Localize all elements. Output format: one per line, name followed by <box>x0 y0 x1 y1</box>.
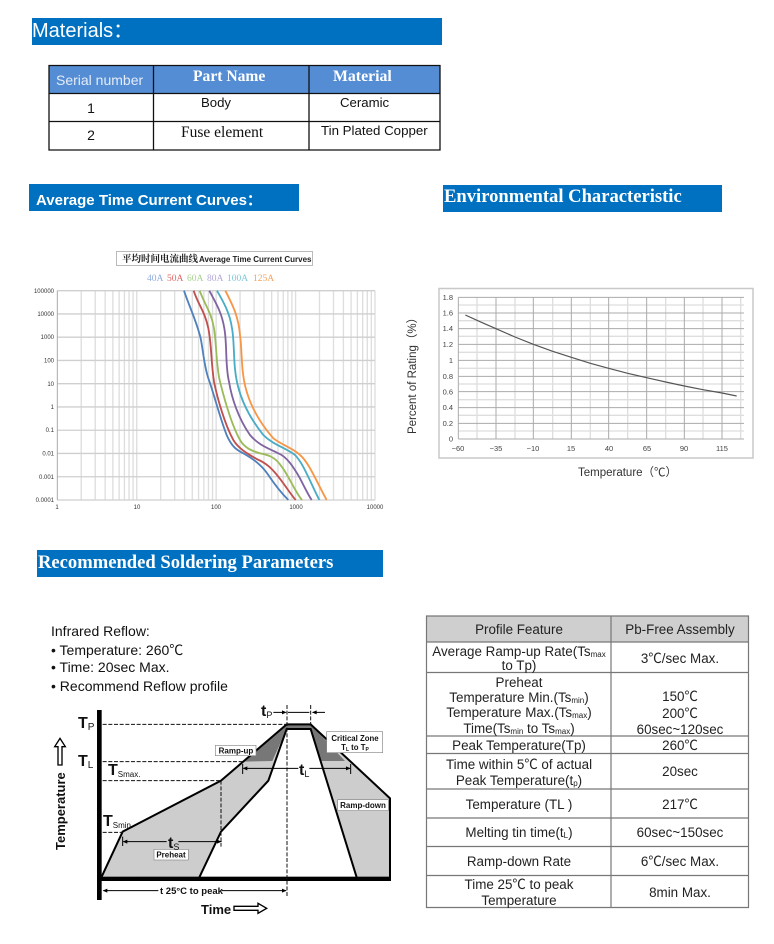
table: materials <box>49 66 440 150</box>
text block: infrared reflow: Infrared Reflow: <box>51 623 150 639</box>
table: soldering profile: Time(Ts <box>463 721 510 736</box>
table: soldering profile: Temperature <box>481 893 557 908</box>
diagram: reflow profile: Time <box>201 902 231 917</box>
chart: environmental characteristic: 0 <box>449 434 453 444</box>
legend: curve ratings: 50A <box>167 274 184 284</box>
text block: infrared reflow: • Recommend Reflow profile <box>51 678 228 694</box>
diagram: reflow profile: L <box>304 769 309 779</box>
diagram: reflow profile: T <box>341 743 346 752</box>
diagram: reflow profile: t <box>299 762 304 779</box>
chart: environmental characteristic: 1.6 <box>443 308 453 318</box>
table: soldering profile: Ramp-down Rate <box>467 854 571 869</box>
table: soldering profile: 60sec~150sec <box>637 825 724 840</box>
table: materials: Ceramic <box>340 95 389 110</box>
heading: Recommended Soldering Parameters: Recommended Soldering Parameters <box>38 552 333 573</box>
chart: environmental characteristic: 1.8 <box>443 293 453 302</box>
diagram: reflow profile: Temperature <box>53 772 68 850</box>
chart title: average time current curves: 平均时间电流曲线 <box>122 253 199 265</box>
diagram: reflow profile: Ramp-up <box>219 746 253 756</box>
table: soldering profile: Profile Feature <box>475 622 563 637</box>
chart: environmental characteristic: 0.6 <box>443 388 453 396</box>
table: soldering profile: 6℃/sec Max. <box>641 854 719 869</box>
diagram: reflow profile: L <box>346 747 349 753</box>
text block: infrared reflow: • Time: 20sec Max. <box>51 659 170 675</box>
diagram: reflow profile: S <box>173 842 179 852</box>
table: soldering profile: Time 25℃ to peak <box>465 877 574 892</box>
legend: curve ratings: 100A <box>227 274 248 284</box>
table: soldering profile: Average Ramp-up Rate(Ts <box>432 644 591 659</box>
chart: average time current curves: 10 <box>47 382 55 388</box>
curve: 40A <box>184 291 288 500</box>
label: Preheat <box>154 849 188 860</box>
table: soldering profile: Melting tin time(t <box>465 825 564 840</box>
table: soldering profile: Temperature (TL ) <box>466 797 572 812</box>
diagram: reflow profile: t <box>261 703 266 720</box>
table: materials: Part Name <box>193 68 265 85</box>
heading: Average Time Current Curves <box>29 184 299 211</box>
label: Ramp-up <box>215 745 256 756</box>
chart: environmental characteristic: 0.4 <box>443 403 453 412</box>
table: soldering profile: 20sec <box>662 764 698 779</box>
chart: environmental characteristic: 115 <box>716 444 728 453</box>
heading: Environmental Characteristic: Environmental Characteristic <box>444 186 682 207</box>
chart: average time current curves: 10000 <box>367 505 384 511</box>
table: soldering profile: ) <box>568 825 573 840</box>
chart: average time current curves: 0.01 <box>42 452 55 458</box>
table: materials: 1 <box>87 100 95 116</box>
label: Ramp-down <box>338 800 388 811</box>
curve: 100A <box>217 291 319 500</box>
table: soldering profile: min <box>571 696 584 705</box>
chart: average time current curves: 1 <box>51 405 55 411</box>
table: materials: Serial number <box>56 72 143 88</box>
table: soldering profile: p <box>573 779 578 788</box>
icon: temperature arrow <box>55 738 65 765</box>
table: soldering profile: Temperature Max.(Ts <box>446 705 572 720</box>
icon: time arrow <box>234 903 267 913</box>
text block: infrared reflow: • Temperature: 260℃ <box>51 642 183 658</box>
table: soldering profile <box>426 616 749 908</box>
chart: environmental characteristic: 1.2 <box>443 340 453 349</box>
table: soldering profile: to Tp) <box>502 658 536 673</box>
diagram: reflow profile: Critical Zone <box>331 734 379 743</box>
heading: Environmental Characteristic <box>443 185 722 212</box>
chart: average time current curves: 1 <box>55 505 59 511</box>
curve: 80A <box>209 291 312 500</box>
chart: environmental characteristic: 1.4 <box>443 324 453 333</box>
chart: average time current curves: 10 <box>134 505 141 511</box>
chart: environmental characteristic: 0.8 <box>443 372 453 381</box>
chart: environmental characteristic: 65 <box>643 444 651 453</box>
chart: environmental characteristic: 15 <box>567 444 575 453</box>
chart: environmental characteristic: 1 <box>449 356 453 365</box>
diagram: reflow profile: t <box>168 835 173 852</box>
table: soldering profile: 3℃/sec Max. <box>641 651 719 666</box>
text block: infrared reflow <box>51 623 228 694</box>
diagram: reflow profile: P <box>88 722 95 733</box>
heading: Average Time Current Curves: Average Time Current Curves： <box>36 192 262 209</box>
table: soldering profile: max <box>572 711 587 720</box>
table: soldering profile: ) <box>587 705 592 720</box>
diagram: reflow profile: T <box>78 715 88 732</box>
chart: environmental characteristic: 40 <box>605 444 613 453</box>
diagram: reflow profile: P <box>266 710 272 720</box>
table: materials: Tin Plated Copper <box>321 123 428 138</box>
table: materials: 2 <box>87 127 95 143</box>
chart: environmental characteristic: −60 <box>452 444 464 453</box>
curve: 125A <box>225 291 327 500</box>
curve: 50A <box>194 291 296 500</box>
table: soldering profile: ) <box>584 690 589 705</box>
legend: curve ratings: 60A <box>187 274 204 284</box>
heading: Materials: Materials： <box>32 20 133 42</box>
table: soldering profile: Time within 5℃ of actual <box>446 757 592 772</box>
chart: average time current curves: 1000 <box>289 505 303 511</box>
legend: curve ratings: 125A <box>253 274 274 284</box>
table: soldering profile: Pb-Free Assembly <box>625 622 735 637</box>
table: soldering profile: 217℃ <box>662 797 698 812</box>
table: soldering profile: Temperature Min.(Ts <box>449 690 571 705</box>
diagram: reflow profile: L <box>88 760 94 771</box>
diagram: reflow profile: to T <box>349 743 366 752</box>
legend: curve ratings: 80A <box>207 274 224 284</box>
label: Critical Zone <box>327 732 383 753</box>
heading: Recommended Soldering Parameters <box>37 550 383 577</box>
diagram: reflow profile: T <box>103 813 113 830</box>
chart: average time current curves: 100 <box>44 358 55 364</box>
chart: environmental characteristic: 90 <box>680 444 688 453</box>
profile band <box>102 724 390 877</box>
table: soldering profile: min <box>510 727 523 736</box>
chart: environmental characteristic: −10 <box>527 444 539 453</box>
table: soldering profile: 260℃ <box>662 738 698 753</box>
chart title: average time current curves <box>116 252 312 266</box>
table: soldering profile: 200℃ <box>662 706 698 721</box>
table: soldering profile: Preheat <box>496 675 543 690</box>
chart: environmental characteristic: Percent of Rating（%） <box>406 312 419 434</box>
chart: environmental characteristic <box>406 288 753 479</box>
chart: environmental characteristic: 0.2 <box>443 419 453 428</box>
chart: average time current curves: 0.001 <box>39 475 55 481</box>
table: soldering profile: max <box>591 650 606 659</box>
chart: environmental characteristic: −35 <box>490 444 502 453</box>
diagram: reflow profile: T <box>78 753 88 770</box>
chart: average time current curves: 1000 <box>41 335 55 341</box>
table: soldering profile: max <box>555 727 570 736</box>
table: soldering profile: to Ts <box>523 721 555 736</box>
table: soldering profile: ) <box>570 721 575 736</box>
legend: curve ratings: 40A <box>147 274 164 284</box>
chart: average time current curves: 0.1 <box>46 428 55 434</box>
table: soldering profile: L <box>564 831 569 840</box>
diagram: reflow profile: T <box>108 762 118 779</box>
table: soldering profile: 60sec~120sec <box>637 722 724 737</box>
diagram: reflow profile: Smin. <box>113 821 133 830</box>
chart: average time current curves <box>34 289 384 511</box>
table: soldering profile: 150℃ <box>662 689 698 704</box>
heading: Materials <box>32 18 442 45</box>
chart title: average time current curves: Average Time Current Curves <box>199 255 312 264</box>
critical zone <box>243 724 345 762</box>
table: soldering profile: 8min Max. <box>649 885 711 900</box>
table: materials: Material <box>333 68 392 85</box>
table: soldering profile: Peak Temperature(t <box>456 773 573 788</box>
legend: curve ratings <box>147 274 274 284</box>
diagram: reflow profile: Ramp-down <box>340 801 386 810</box>
curve: 60A <box>200 291 302 500</box>
chart: average time current curves: 0.0001 <box>36 498 55 504</box>
chart: average time current curves: 100000 <box>34 289 55 295</box>
chart: average time current curves: 10000 <box>37 312 55 318</box>
table: materials: Body <box>201 95 231 110</box>
diagram: reflow profile: Preheat <box>156 850 186 860</box>
table: materials: Fuse element <box>181 124 264 141</box>
diagram: reflow profile <box>53 703 391 917</box>
table: soldering profile: Peak Temperature(Tp) <box>452 738 586 753</box>
curve: derating <box>465 315 737 396</box>
diagram: reflow profile: Smax. <box>118 770 140 779</box>
table: soldering profile: ) <box>578 773 582 788</box>
diagram: reflow profile: P <box>365 747 369 753</box>
diagram: reflow profile: t 25°C to peak <box>160 886 224 897</box>
chart: average time current curves: 100 <box>211 505 222 511</box>
chart: environmental characteristic: Temperature（℃） <box>578 466 677 479</box>
